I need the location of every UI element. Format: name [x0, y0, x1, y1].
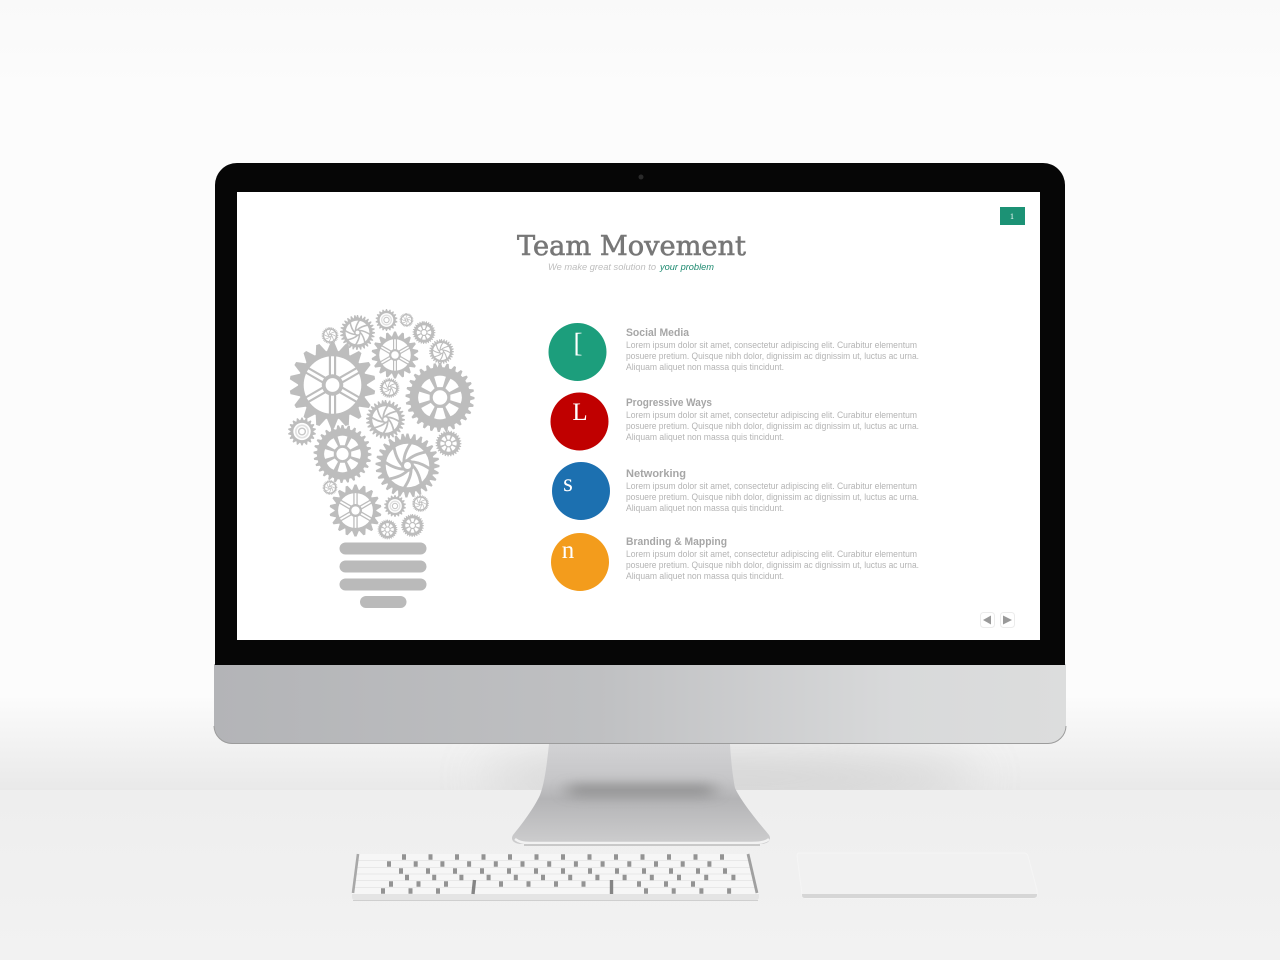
progressive ways text	[626, 397, 919, 442]
light bulb made of gears	[279, 307, 484, 608]
social media text: Lorem ipsum dolor sit amet, consectetur adipiscing elit. Curabitur elementum	[626, 340, 917, 350]
screen	[237, 192, 1040, 640]
item: networking	[552, 462, 919, 520]
arrow: next	[1000, 612, 1014, 628]
item: progressive ways	[550, 392, 919, 450]
icon: green circle: [	[574, 328, 582, 358]
progressive ways text: Progressive Ways	[626, 397, 712, 409]
monitor	[214, 163, 1066, 845]
slide content	[279, 207, 1025, 628]
bulb base bars	[340, 542, 426, 608]
icon: orange circle: n	[562, 537, 575, 564]
networking text: Networking	[626, 468, 686, 480]
icon: blue circle: s	[563, 470, 573, 497]
item: social media	[548, 323, 919, 381]
icon: blue circle	[552, 462, 610, 520]
branding and mapping text: posuere pretium. Quisque nibh dolor, dignissim ac dignissim ut, luctus ac urna.	[626, 560, 919, 570]
page number badge	[1000, 207, 1025, 225]
branding and mapping text: Aliquam aliquet non massa quis tincidunt.	[626, 571, 784, 581]
social media text: posuere pretium. Quisque nibh dolor, dignissim ac dignissim ut, luctus ac urna.	[626, 351, 919, 361]
keyboard	[352, 854, 759, 900]
branding and mapping text: Branding & Mapping	[626, 536, 727, 548]
networking text: posuere pretium. Quisque nibh dolor, dignissim ac dignissim ut, luctus ac urna.	[626, 492, 919, 502]
progressive ways text: Aliquam aliquet non massa quis tincidunt.	[626, 432, 784, 442]
subtitle: your problem	[659, 262, 714, 273]
icon: red circle	[550, 392, 608, 450]
arrow: previous	[980, 612, 994, 628]
social media text	[626, 327, 919, 372]
title: Team Movement	[517, 231, 746, 262]
social media text: Aliquam aliquet non massa quis tincidunt.	[626, 362, 784, 372]
icon: red circle: L	[572, 399, 588, 426]
monitor chin	[214, 664, 1066, 744]
navigation arrows	[980, 612, 1014, 628]
networking text	[626, 468, 919, 513]
page number badge: 1	[1010, 212, 1014, 221]
icon: green circle	[548, 323, 606, 381]
subtitle	[548, 262, 714, 273]
monitor bezel	[215, 163, 1065, 665]
networking text: Aliquam aliquet non massa quis tincidunt.	[626, 503, 784, 513]
icon: orange circle	[551, 533, 609, 591]
monitor stand	[512, 744, 770, 845]
networking text: Lorem ipsum dolor sit amet, consectetur adipiscing elit. Curabitur elementum	[626, 481, 917, 491]
trackpad	[797, 853, 1037, 898]
gear cluster	[279, 307, 484, 542]
branding and mapping text	[626, 536, 919, 581]
social media text: Social Media	[626, 327, 690, 339]
progressive ways text: Lorem ipsum dolor sit amet, consectetur adipiscing elit. Curabitur elementum	[626, 410, 917, 420]
branding and mapping text: Lorem ipsum dolor sit amet, consectetur adipiscing elit. Curabitur elementum	[626, 549, 917, 559]
background: desk	[0, 790, 1280, 960]
progressive ways text: posuere pretium. Quisque nibh dolor, dignissim ac dignissim ut, luctus ac urna.	[626, 421, 919, 431]
subtitle: We make great solution to	[548, 262, 656, 273]
item: branding and mapping	[551, 533, 919, 591]
shadow behind stand	[480, 754, 980, 802]
camera	[638, 174, 644, 180]
